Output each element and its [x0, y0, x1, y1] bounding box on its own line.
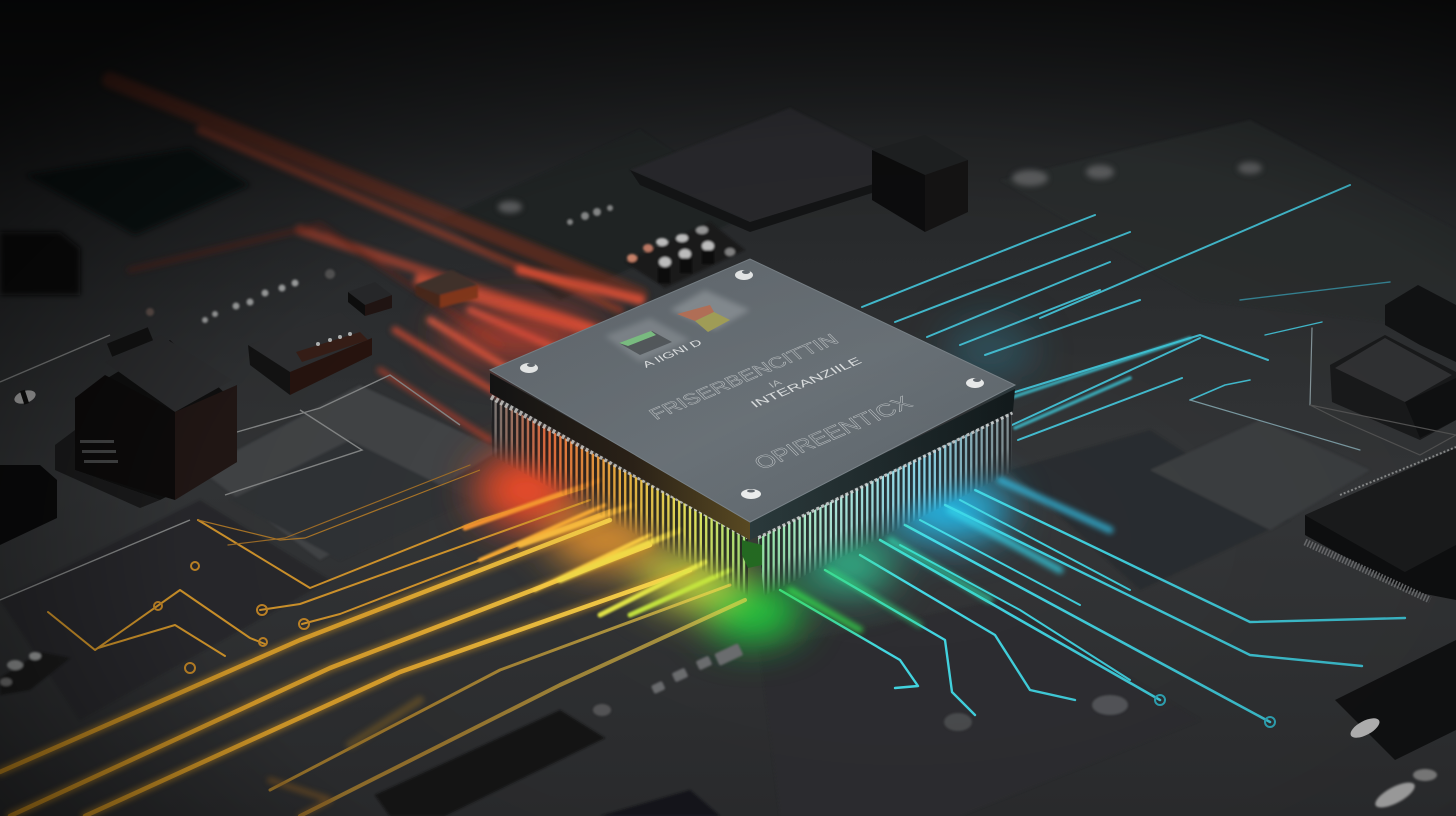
orange and yellow circuit traces: [0, 465, 745, 816]
cyan and green traces: lower right: [780, 490, 1405, 722]
chip text: IA: [766, 378, 785, 390]
pads: bottom center: [593, 643, 1128, 731]
chip label: green window: [605, 318, 690, 362]
left black cube component: [55, 327, 237, 508]
glossy component: left: [13, 388, 37, 406]
right components: [1310, 285, 1456, 455]
capacitor row: left: [146, 269, 335, 323]
small red part: [415, 270, 478, 308]
chip label: orange window: [670, 290, 750, 332]
chip text: OPIREENTICX: [749, 393, 917, 474]
right IC: [1305, 447, 1456, 600]
capacitor cluster above chip: [625, 222, 745, 288]
chip text: FRISERBENCITTIN: [645, 331, 843, 423]
bottom right corner parts: [1335, 640, 1456, 812]
pins: right side: [758, 412, 1012, 596]
cyan traces: upper right: [862, 185, 1390, 450]
small pads: bottom left: [0, 652, 70, 695]
bottom components: [375, 710, 720, 816]
yellow circuit loop: [48, 590, 265, 650]
top IC component: [630, 108, 968, 232]
chip: [490, 259, 1015, 596]
dark blocks: top left: [0, 148, 250, 295]
white traces: left area: [0, 335, 460, 600]
orange fan glow over traces: [465, 480, 730, 615]
thick yellow traces: [0, 520, 745, 816]
chip sides: [490, 373, 750, 540]
green pad below corner: [742, 540, 762, 568]
red glow streaks: upper left: [110, 80, 640, 440]
thin yellow traces: [198, 465, 610, 624]
small black part: [348, 282, 392, 316]
chip text: [640, 331, 917, 474]
small pads: top right: [498, 162, 1262, 213]
cyan glow near chip: [790, 480, 1110, 630]
orange outline trace: [198, 470, 480, 540]
pins: left side: [491, 397, 748, 596]
corner screws: [520, 270, 984, 499]
blurred trace glow: [0, 520, 690, 816]
chip text: A IIGNI D: [640, 338, 705, 370]
dark block: far left: [0, 465, 57, 545]
color glow beneath chip: [440, 310, 1035, 642]
relay component: [248, 312, 372, 395]
chip top face: [490, 259, 1015, 522]
chip text: INTERANZIILE: [748, 355, 865, 410]
